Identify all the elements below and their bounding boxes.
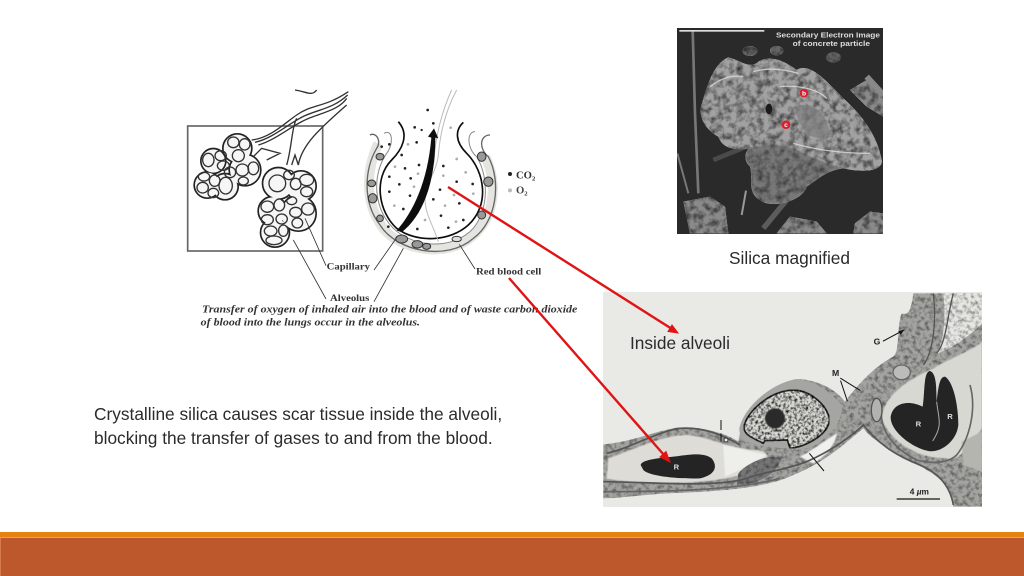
annotations G and M: M — [832, 368, 839, 378]
marker b: b — [802, 90, 806, 97]
legend: CO2 and O2: 2 — [532, 175, 536, 182]
large curved arrow — [397, 128, 438, 232]
scale bar — [679, 30, 764, 32]
annotations G and M — [832, 330, 904, 401]
marker c: c — [784, 122, 788, 129]
red blood cell, lower left: R — [674, 463, 680, 472]
tissue wall — [603, 293, 982, 507]
diagram: alveolus gas exchange — [188, 90, 578, 329]
diagram labels: Red blood cell — [476, 267, 542, 277]
legend: CO2 and O2: 2 — [524, 190, 528, 197]
main particle — [701, 57, 882, 204]
diagram labels — [327, 262, 542, 304]
text block: crystalline silica: blocking the transfer of gases to and from the blood. — [94, 428, 493, 448]
inset box with alveolar clusters — [188, 90, 348, 251]
marker c — [782, 120, 790, 129]
text block: crystalline silica: Crystalline silica causes scar tissue inside the alveoli, — [94, 404, 502, 424]
background debris — [683, 46, 883, 233]
annotations G and M: G — [874, 337, 881, 347]
legend: CO2 and O2 — [508, 171, 536, 197]
red blood cells, right — [891, 371, 958, 451]
photo: silica particle micrograph — [677, 28, 883, 234]
diagram labels: Capillary — [327, 262, 370, 272]
scale bar 4 µm: 4 µm — [910, 486, 929, 496]
alveolus cross-section — [367, 90, 496, 251]
footer band — [0, 532, 1024, 576]
label: inside alveoli: Inside alveoli — [630, 333, 730, 353]
scale bar 4 µm — [896, 488, 940, 500]
red blood cells, right: R — [916, 420, 922, 429]
micrograph caption: of concrete particle — [793, 41, 870, 48]
legend: CO2 and O2: CO — [516, 171, 532, 182]
red arrow to inside alveoli — [448, 187, 678, 333]
CO2 dots — [380, 109, 474, 230]
red arrow to red blood cell — [509, 278, 670, 462]
red blood cell, lower left — [641, 454, 715, 478]
lobe outlines — [195, 134, 316, 247]
O2 dots — [393, 126, 475, 223]
label: silica magnified: Silica magnified — [729, 248, 850, 268]
legend: CO2 and O2: O — [516, 186, 524, 197]
photo: electron micrograph of alveolar wall — [603, 292, 982, 507]
diagram caption: Transfer of oxygen of inhaled air into the blood and of waste carbon dioxide — [202, 304, 578, 315]
lobe interiors — [195, 135, 315, 246]
diagram caption — [201, 304, 578, 329]
diagram labels: Alveolus — [330, 294, 370, 304]
micrograph caption — [776, 32, 880, 48]
red blood cells, right: R — [947, 412, 953, 421]
micrograph caption: Secondary Electron Image — [776, 32, 880, 39]
cell nucleus — [739, 379, 842, 449]
leader lines — [293, 218, 475, 302]
diagram caption: of blood into the lungs occur in the alveolus. — [201, 318, 420, 329]
marker b — [800, 89, 808, 97]
capillary cells — [368, 152, 493, 249]
alveolar cell network — [197, 137, 314, 245]
text block: crystalline silica — [94, 404, 502, 448]
small measurement arrows — [721, 420, 824, 471]
